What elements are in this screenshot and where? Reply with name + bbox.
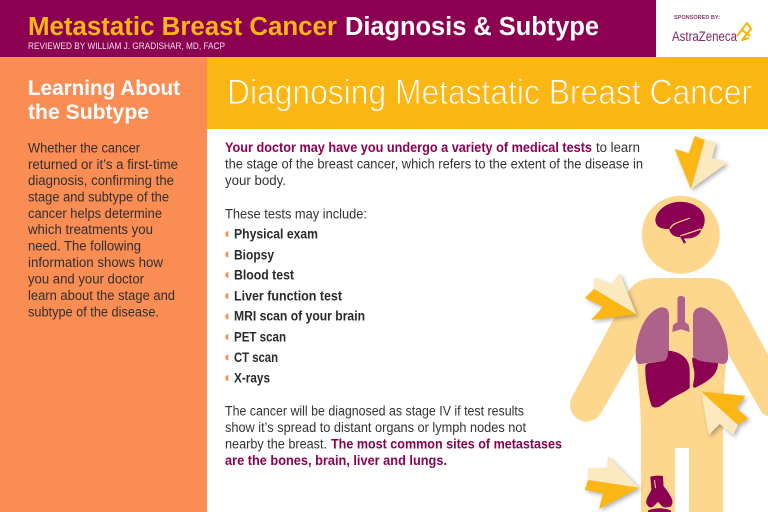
closing paragraph: nearby the breast. <box>225 436 327 452</box>
sidebar heading: the Subtype <box>28 100 149 124</box>
arrow: pointing to lungs <box>585 273 636 320</box>
test list <box>225 226 365 386</box>
sidebar text: cancer helps determine <box>28 206 162 222</box>
sponsor logo: AstraZeneca <box>672 29 737 44</box>
body silhouette <box>570 278 768 512</box>
sidebar text: diagnosis, confirming the <box>28 173 174 189</box>
sidebar text: subtype of the disease. <box>28 304 159 320</box>
sidebar text: which treatments you <box>27 222 153 238</box>
intro paragraph: Your doctor may have you undergo a variety of medical tests <box>225 140 592 156</box>
sidebar panel <box>0 57 207 512</box>
intro paragraph: your body. <box>225 173 286 189</box>
liver <box>645 351 690 407</box>
sidebar text: learn about the stage and <box>28 288 175 304</box>
sidebar text: returned or it’s a first-time <box>28 157 178 173</box>
test list: CT scan <box>234 350 278 366</box>
icon: AstraZeneca mark <box>737 23 751 40</box>
test list: Biopsy <box>234 248 274 264</box>
stomach <box>692 358 718 388</box>
sidebar text: stage and subtype of the <box>28 190 169 206</box>
header banner <box>0 0 656 57</box>
sponsor logo <box>672 15 751 44</box>
arrow: pointing to liver <box>701 392 748 435</box>
sidebar heading <box>28 76 180 124</box>
title <box>28 13 599 41</box>
arrow: pointing to bone <box>585 456 639 509</box>
heading band <box>207 57 768 129</box>
sidebar text: Whether the cancer <box>28 140 140 156</box>
test list: X-rays <box>234 370 270 386</box>
head <box>642 196 720 274</box>
icon: knee joint <box>646 476 672 512</box>
test list: Liver function test <box>234 288 342 304</box>
sidebar text: you and your doctor <box>28 272 144 288</box>
sidebar text <box>27 140 178 320</box>
body illustration <box>570 196 768 512</box>
arrow: pointing to brain <box>675 136 727 189</box>
intro paragraph: to learn <box>596 140 640 156</box>
closing paragraph: The cancer will be diagnosed as stage IV if test results <box>225 404 524 420</box>
test list: MRI scan of your brain <box>234 308 365 324</box>
sponsor logo: SPONSORED BY: <box>674 15 720 21</box>
test list: PET scan <box>234 330 286 346</box>
title: Diagnosis & Subtype <box>345 13 599 41</box>
closing paragraph <box>225 404 562 469</box>
sidebar text: need. The following <box>28 238 141 254</box>
reviewer credit: REVIEWED BY WILLIAM J. GRADISHAR, MD, FACP <box>28 41 225 52</box>
closing paragraph: The most common sites of metastases <box>331 436 562 452</box>
lungs <box>636 296 728 364</box>
icon: brain <box>655 202 705 243</box>
sidebar text: information shows how <box>28 255 164 271</box>
intro paragraph <box>225 140 643 189</box>
closing paragraph: are the bones, brain, liver and lungs. <box>225 453 447 469</box>
test list: Physical exam <box>234 226 318 242</box>
title: Metastatic Breast Cancer <box>28 13 337 41</box>
list intro: These tests may include: <box>225 206 367 222</box>
closing paragraph: show it’s spread to distant organs or lymph nodes not <box>225 420 526 436</box>
intro paragraph: the stage of the breast cancer, which refers to the extent of the disease in <box>225 156 643 172</box>
test list: Blood test <box>234 268 294 284</box>
sidebar heading: Learning About <box>28 76 180 100</box>
